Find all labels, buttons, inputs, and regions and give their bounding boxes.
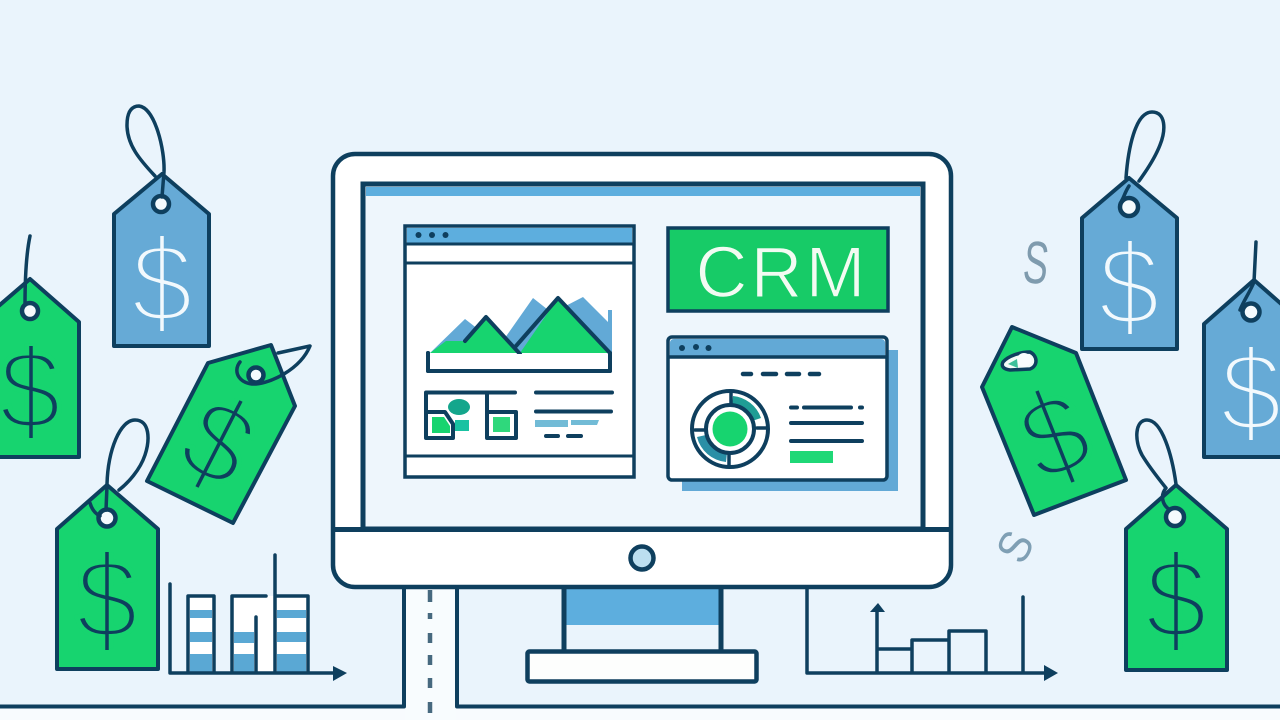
price tag: green far left: $	[0, 328, 61, 453]
price tag: green tilted right: $	[1003, 367, 1107, 506]
price tag: blue upper right	[1082, 112, 1177, 349]
CRM heading: CRM	[696, 233, 868, 313]
text lines	[790, 408, 862, 463]
price tag: green lower left	[57, 420, 158, 669]
floating dollar glyph: upper: S	[1020, 228, 1052, 297]
bar chart: right	[807, 587, 1058, 681]
road and ground line	[0, 585, 1280, 720]
price tag: green lower right: $	[1145, 537, 1207, 662]
price tag: green lower right	[1126, 420, 1227, 670]
panel: CRM banner	[668, 228, 888, 313]
panel: dashboard window	[668, 337, 898, 491]
price tag: blue top left: $	[131, 221, 193, 346]
price tag: green far left	[0, 236, 79, 457]
thumbnails	[426, 392, 516, 438]
price tag: green tilted right	[982, 327, 1126, 515]
power button	[630, 546, 654, 570]
price tag: blue upper right: $	[1098, 224, 1160, 349]
text lines	[535, 392, 612, 436]
price tag: blue far right	[1204, 242, 1280, 457]
price tag: green lower left: $	[76, 537, 138, 662]
bar chart: left	[170, 555, 347, 681]
floating dollar glyph: lower: S	[986, 523, 1045, 571]
monitor stand	[528, 586, 756, 682]
panel: area chart window	[405, 226, 634, 477]
screen	[363, 184, 923, 529]
price tag: green tilted left: $	[162, 373, 274, 512]
price tag: blue top left	[114, 106, 209, 346]
area chart	[428, 297, 612, 371]
price tag: green tilted left	[147, 345, 310, 523]
donut gauge	[692, 391, 768, 467]
monitor	[333, 154, 951, 587]
